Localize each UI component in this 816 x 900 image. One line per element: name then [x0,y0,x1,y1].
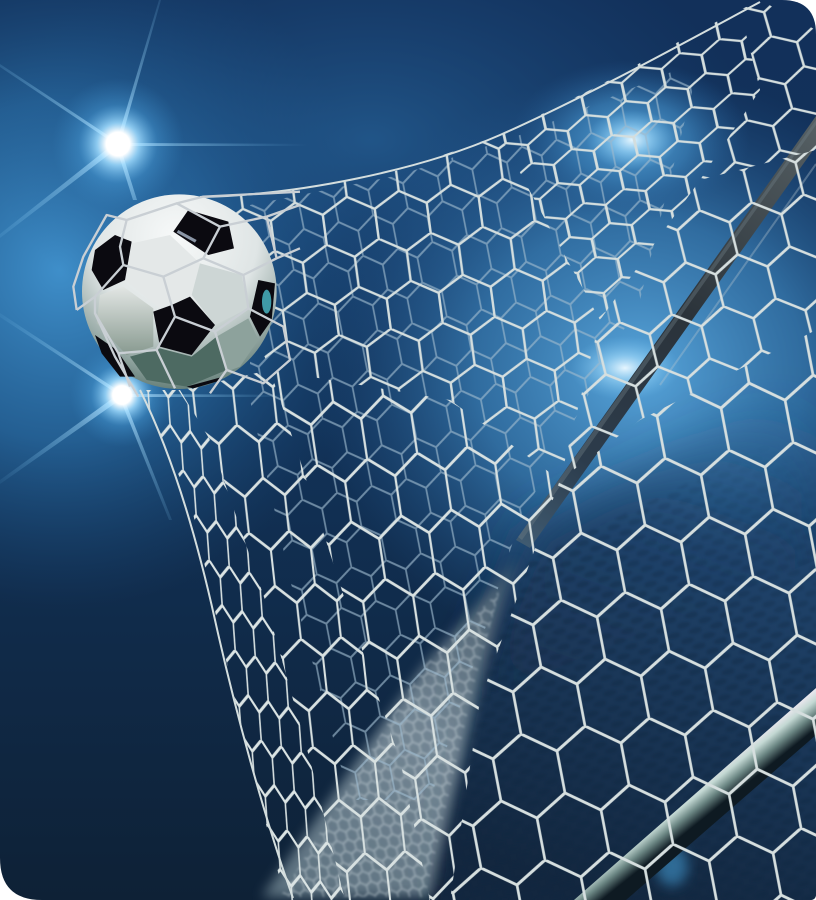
back wall of the goal [430,380,816,900]
ball shaded panels [97,235,258,387]
lower goal post [574,688,816,900]
ball body [82,194,277,389]
net sagging band [262,560,517,897]
soccer ball [73,192,300,397]
stadium light: upper background glows [578,114,673,394]
ball highlights [177,230,271,314]
stadium light: upper flare [0,0,286,238]
upper goal post [516,116,816,548]
stadium light: lower flare [0,317,272,520]
rear net layer [250,60,700,800]
ball black pentagons [92,210,275,388]
net over the ball [73,192,300,397]
